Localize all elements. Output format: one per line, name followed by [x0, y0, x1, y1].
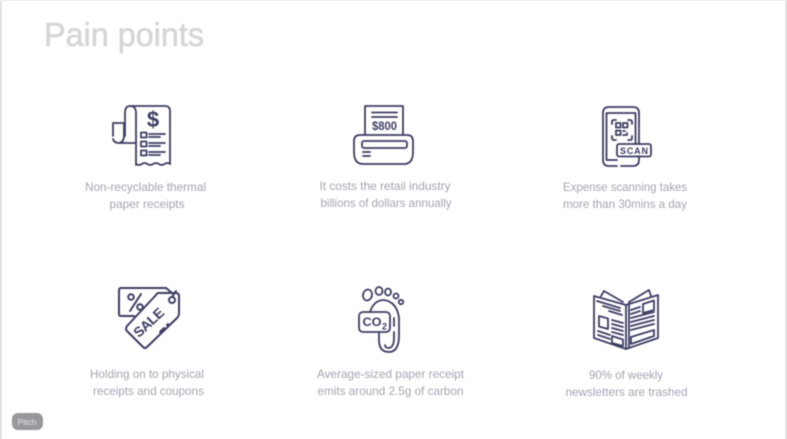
- text: retail cost: billions of dollars annually: [320, 196, 452, 210]
- icon: footprint with CO2: 2: [382, 322, 387, 332]
- text: non-recyclable receipts: Non-recyclable thermal: [85, 180, 206, 194]
- icon: printer with $800 receipt: $800: [372, 121, 397, 133]
- text: expense scanning: Expense scanning takes: [563, 180, 687, 194]
- icon: sale tags: SALE: [130, 304, 167, 340]
- text: retail cost: It costs the retail industry: [320, 179, 450, 193]
- panel: expense scanning: [563, 107, 687, 211]
- panel: carbon footprint: [317, 287, 465, 398]
- panel: newsletters trashed: [566, 290, 688, 399]
- text: holding receipts: [90, 367, 204, 398]
- text: non-recyclable receipts: paper receipts: [110, 197, 184, 211]
- icon: footprint with CO2: CO: [362, 315, 382, 329]
- text: expense scanning: more than 30mins a day: [563, 197, 687, 211]
- icon: dollar sign: $: [147, 107, 159, 132]
- icon: footprint with CO2: [359, 287, 403, 352]
- text: carbon emissions: emits around 2.5g of carbon: [318, 384, 464, 398]
- panel: thermal paper receipts: [85, 106, 206, 211]
- text: holding receipts: receipts and coupons: [93, 384, 204, 398]
- text: newsletters: [566, 368, 688, 399]
- title: Pain points: [44, 16, 204, 53]
- badge: Pitch: Pitch: [18, 417, 37, 427]
- panel: physical receipts and coupons: [90, 288, 204, 398]
- badge: Pitch: [12, 413, 43, 430]
- text: newsletters: newsletters are trashed: [566, 385, 688, 399]
- panel: retail industry cost: [320, 106, 452, 210]
- text: carbon emissions: [317, 367, 465, 398]
- text: non-recyclable receipts: [85, 180, 206, 211]
- text: expense scanning: [563, 180, 687, 211]
- icon: receipt: [113, 106, 170, 165]
- icon: open newspaper: [594, 290, 658, 349]
- text: retail cost: [320, 179, 452, 210]
- icon: phone with scan label: SCAN: [620, 146, 648, 156]
- text: newsletters: 90% of weekly: [589, 368, 663, 382]
- text: carbon emissions: Average-sized paper receipt: [317, 367, 465, 381]
- text: holding receipts: Holding on to physical: [90, 367, 204, 381]
